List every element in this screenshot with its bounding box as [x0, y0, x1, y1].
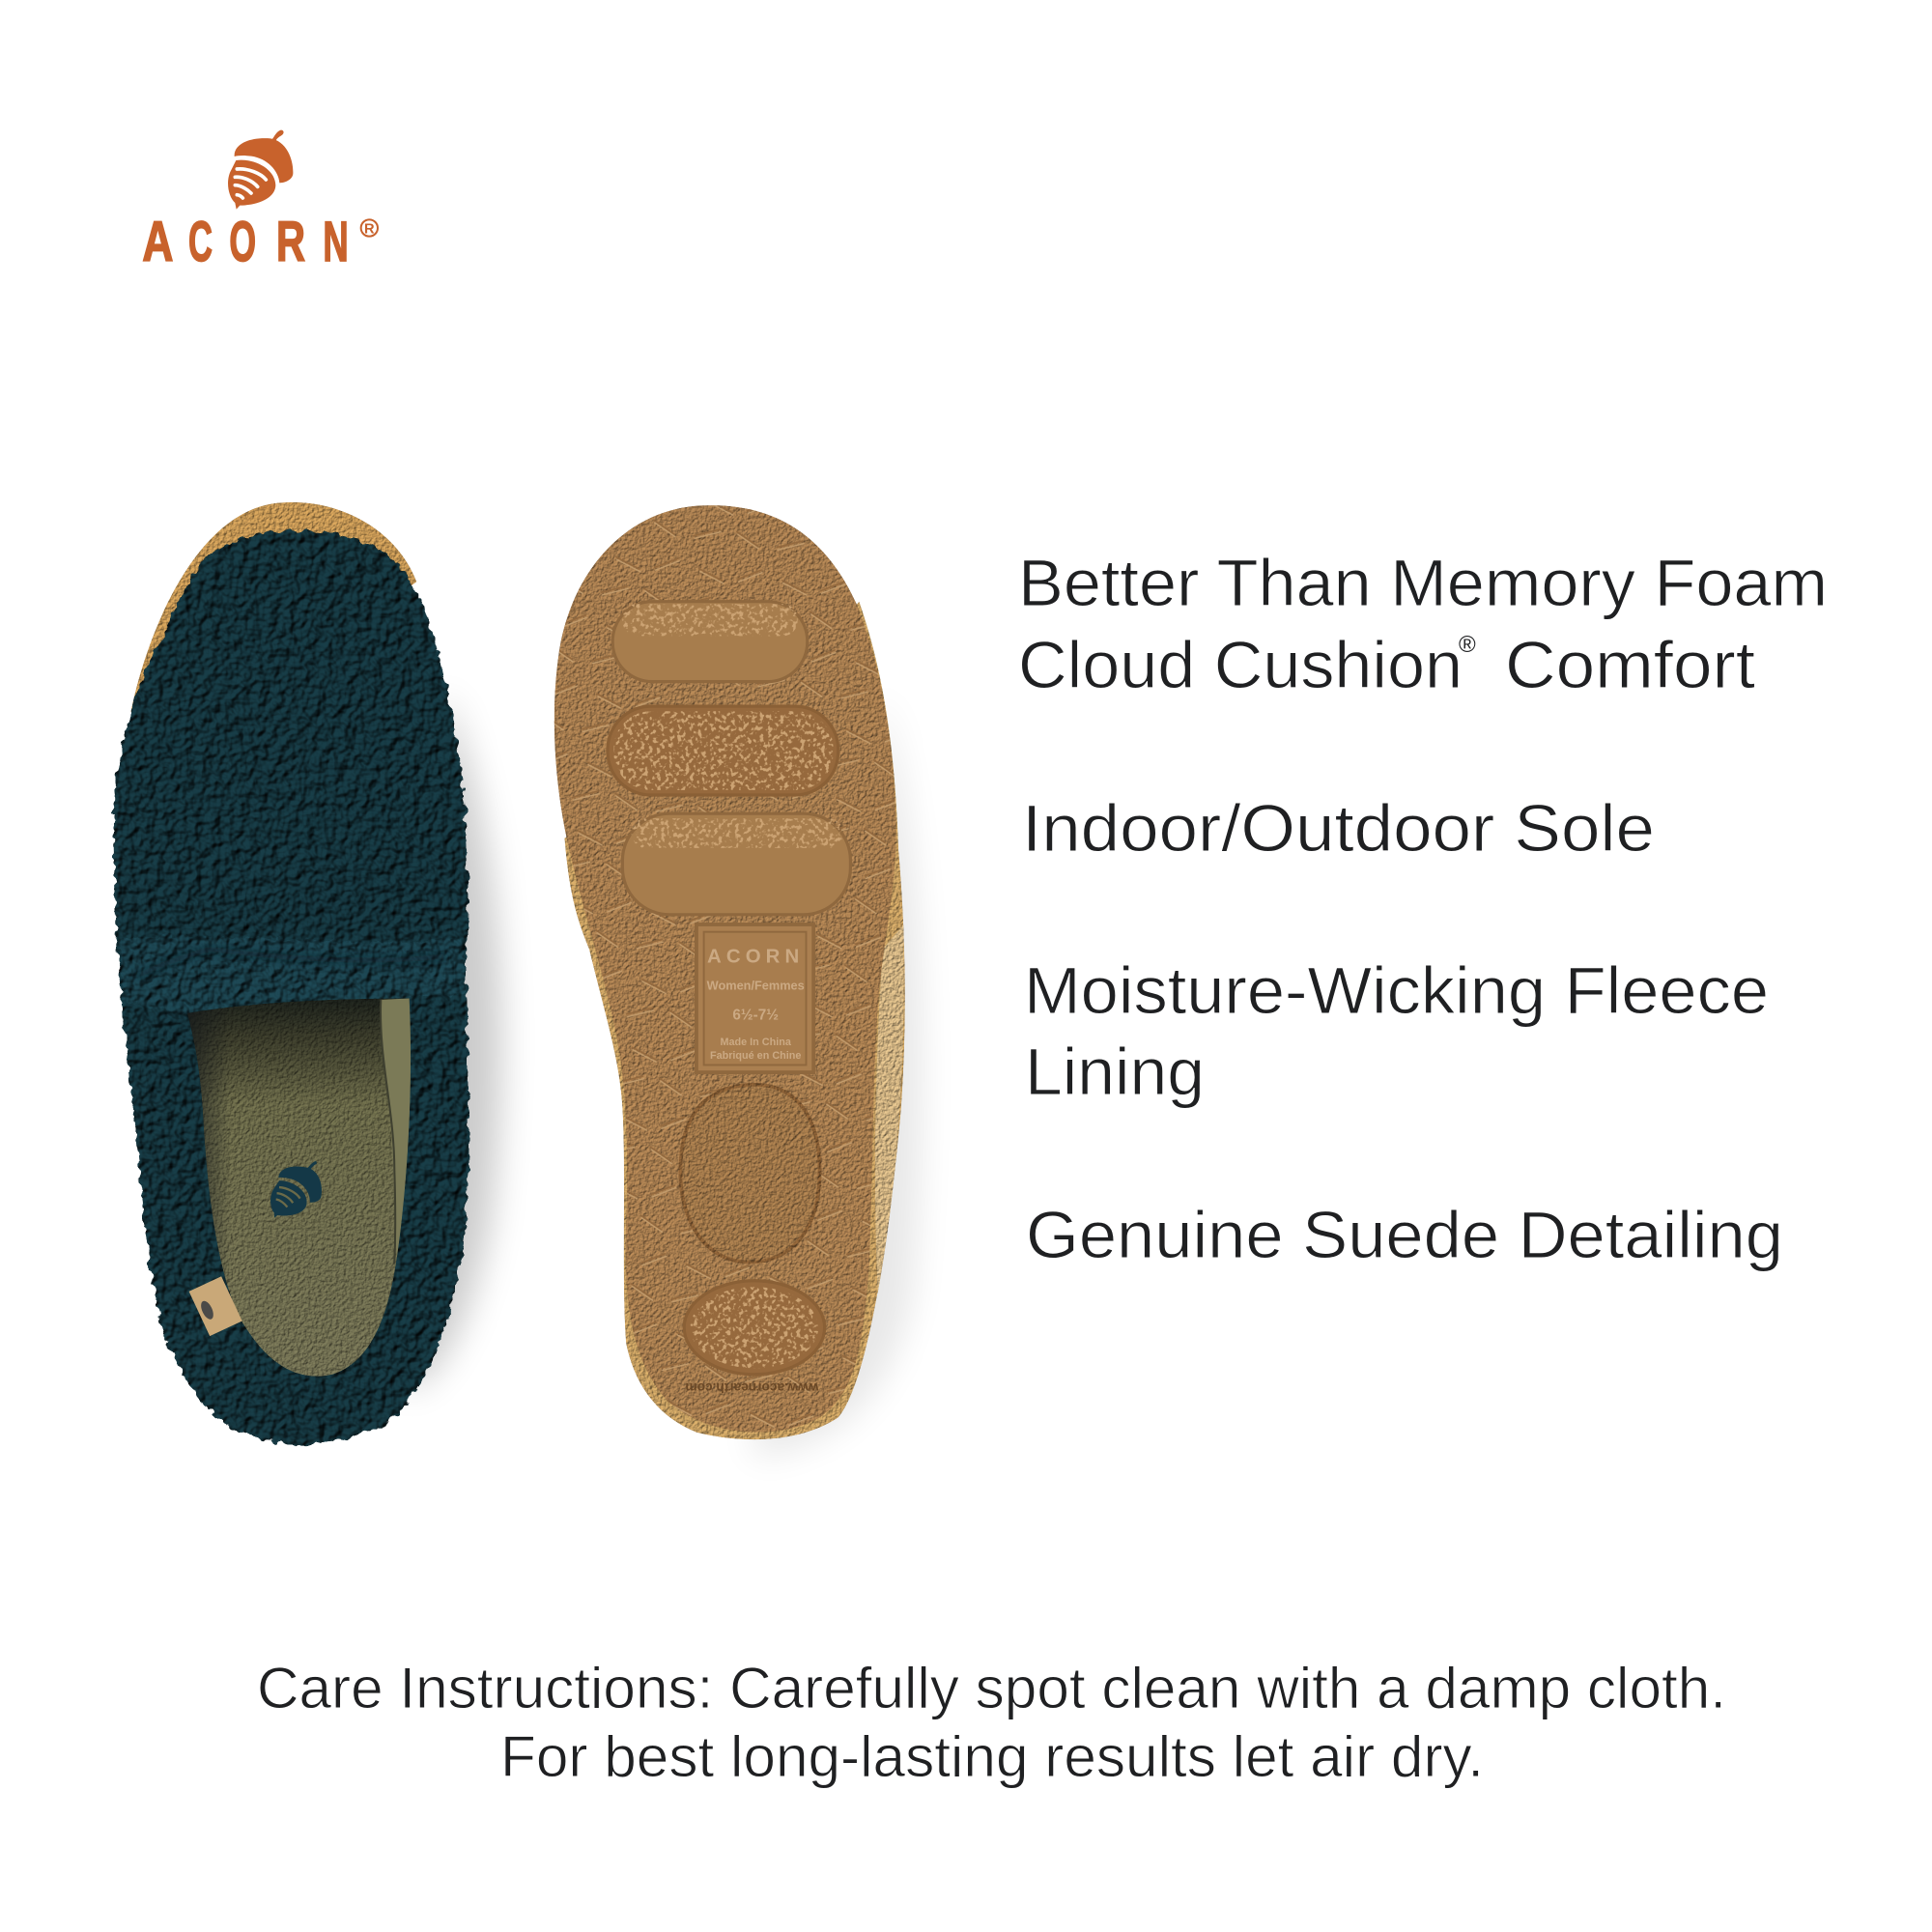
- left slipper: top view: [113, 502, 501, 1444]
- care instructions: Care Instructions: Carefully spot clean with a damp cloth.: [257, 1656, 1726, 1720]
- logo wordmark: A: [142, 211, 173, 273]
- size label emboss: Made In China: [720, 1037, 792, 1048]
- care instructions: [257, 1656, 1726, 1789]
- logo wordmark: C: [188, 211, 213, 273]
- collar fold band: [120, 936, 464, 1015]
- infographic canvas: [111, 129, 1823, 1788]
- feature: fleece lining: [1024, 953, 1769, 1109]
- rubber sole: [554, 505, 896, 1433]
- feature: cloud cushion comfort: [1018, 628, 1755, 702]
- tread pad 3: [622, 813, 850, 915]
- inner side lining strip: [381, 999, 411, 1258]
- icon: embroidered acorn on insole: [268, 1157, 326, 1224]
- feature: cloud cushion comfort: Comfort: [1505, 628, 1755, 702]
- insole side shade: [187, 1000, 333, 1377]
- embossed leaf pattern: [554, 505, 895, 1428]
- size label emboss: Women/Femmes: [707, 979, 805, 993]
- feature: suede: Genuine Suede Detailing: [1026, 1198, 1783, 1272]
- care instructions: For best long-lasting results let air dry.: [500, 1724, 1484, 1789]
- sherpa upper: [113, 531, 469, 1444]
- right slipper: sole view: [542, 493, 922, 1457]
- suede heel tab: [189, 1276, 242, 1336]
- feature: memory foam: Better Than Memory Foam: [1018, 546, 1828, 620]
- suede toe edge: [130, 502, 416, 713]
- logo wordmark: R: [364, 221, 375, 237]
- suede sides: [564, 602, 905, 1439]
- tread pad 2: [608, 706, 838, 795]
- icon: acorn: [228, 130, 293, 210]
- heel pad 5: [684, 1281, 825, 1375]
- suede highlight patch: [875, 924, 904, 1294]
- logo wordmark: R: [276, 211, 305, 273]
- sole url text: www.acornearth.com: [685, 1380, 819, 1396]
- size label emboss: 6½-7½: [732, 1007, 779, 1023]
- feature list: [1018, 546, 1828, 1272]
- size label emboss: ACORN: [707, 947, 804, 968]
- feature: fleece lining: Moisture-Wicking Fleece: [1024, 953, 1769, 1028]
- lining stitch: [381, 1000, 395, 1264]
- collar crease: [138, 950, 443, 977]
- tread pad 1: [612, 602, 808, 682]
- fleece insole: [187, 999, 411, 1377]
- size label emboss: [696, 924, 813, 1072]
- logo wordmark: [142, 211, 378, 273]
- feature: fleece lining: Lining: [1025, 1035, 1205, 1109]
- logo wordmark: N: [323, 211, 349, 273]
- feature: cloud cushion comfort: Cloud Cushion: [1018, 628, 1463, 702]
- brand logo: ACORN: [142, 130, 378, 273]
- slipper drop shadow: [370, 691, 501, 1393]
- heel pad 4: [680, 1085, 820, 1263]
- feature: cloud cushion comfort: ®: [1459, 632, 1476, 658]
- logo wordmark: O: [229, 211, 256, 273]
- feature: sole: Indoor/Outdoor Sole: [1022, 791, 1655, 866]
- size label emboss: Fabriqué en Chine: [710, 1050, 801, 1062]
- sole drop shadow: [752, 691, 922, 1457]
